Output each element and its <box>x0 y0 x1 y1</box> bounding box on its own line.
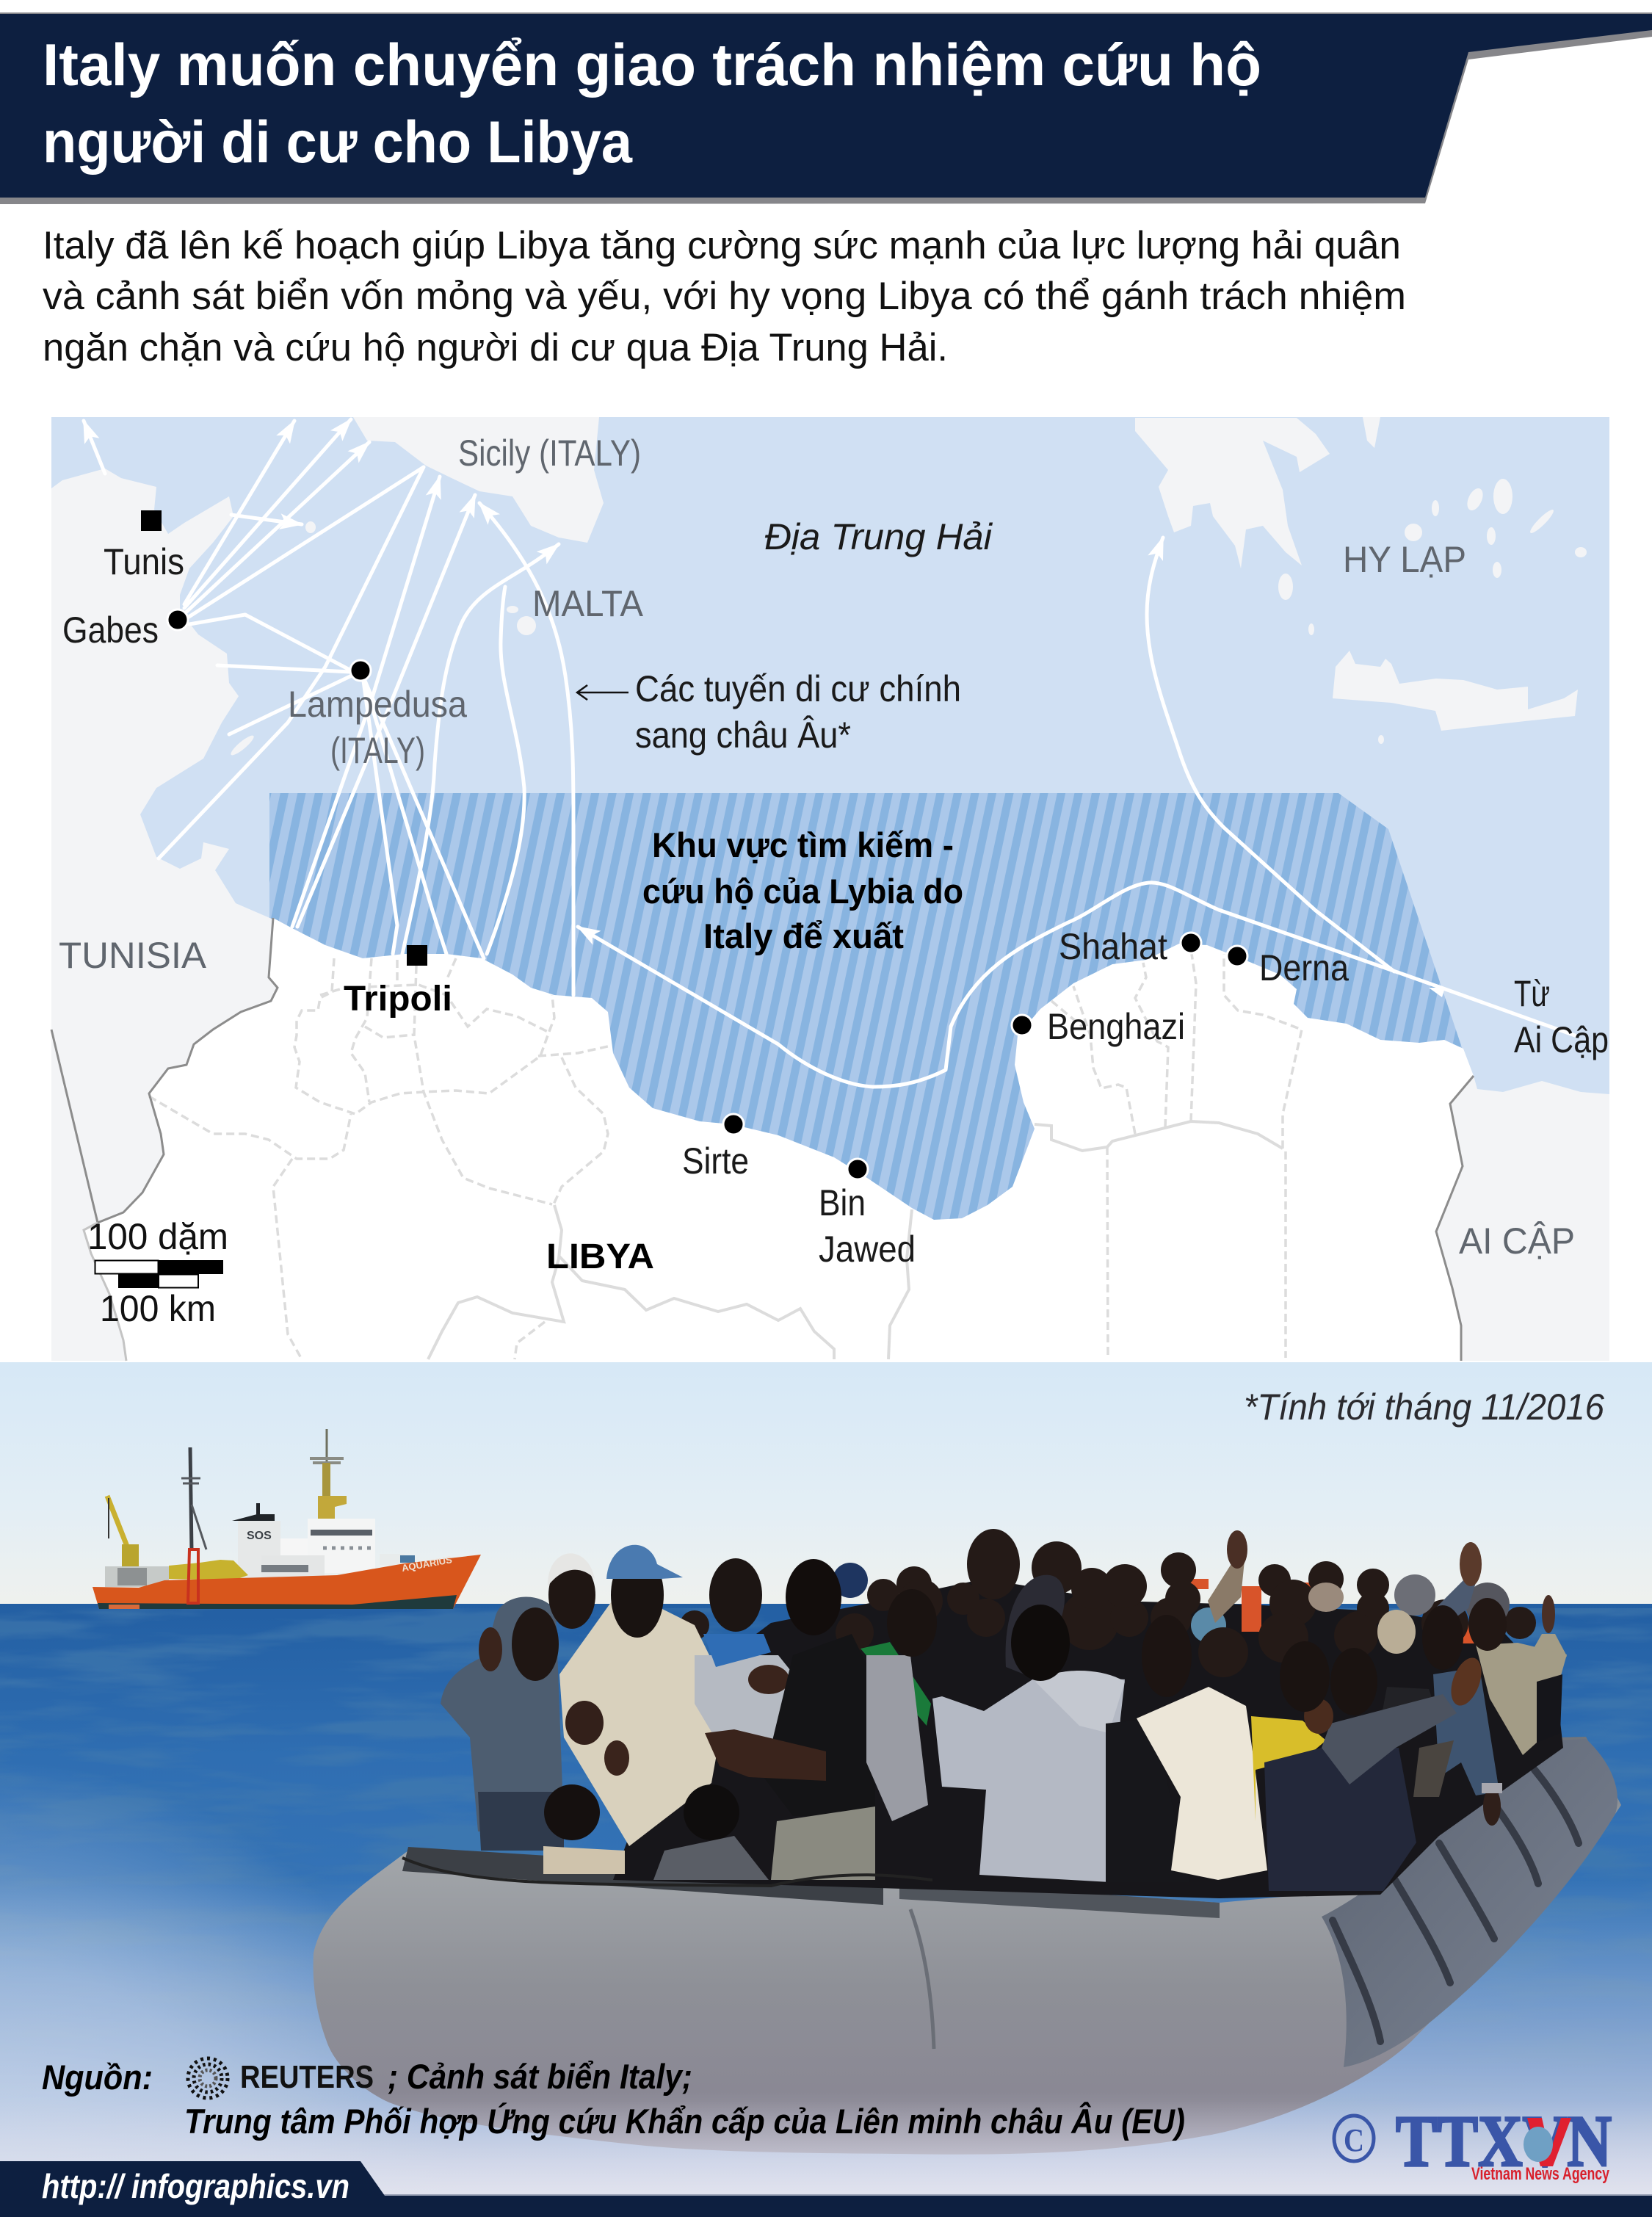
Reuters logo <box>188 2058 374 2098</box>
islands: Malta and Pantelleria <box>228 521 540 758</box>
ship <box>93 1429 481 1609</box>
man in white puffer jacket <box>1137 1615 1267 1880</box>
map labels: cities: Benghazi <box>1047 1006 1185 1047</box>
map labels: sea and countries <box>59 433 1575 1262</box>
man in navy with raised arm <box>1264 1641 1488 1891</box>
zone label <box>642 825 963 955</box>
background heads <box>680 1529 1536 1677</box>
capital markers <box>141 510 427 966</box>
icon: Reuters dot sphere <box>188 2058 228 2098</box>
map labels: cities: sang châu Âu* <box>635 715 851 756</box>
man with white hat <box>548 1553 595 1629</box>
dark jacket and striped sleeve <box>1380 1687 1454 1797</box>
land: Tunisia and Algeria <box>51 469 294 1361</box>
migration routes <box>84 419 1575 1087</box>
sea <box>0 1604 1652 2217</box>
raised arms and hands <box>1208 1530 1567 1696</box>
blue cap in crowd <box>1191 1607 1226 1643</box>
source block: ; Cảnh sát biển Italy; <box>388 2057 692 2096</box>
front tube seam <box>910 1909 934 2049</box>
yellow jacket <box>1251 1716 1326 1821</box>
man in black shirt <box>705 1559 875 1816</box>
map labels: sea and countries: (ITALY) <box>330 730 425 771</box>
map labels: cities: Ai Cập <box>1514 1019 1609 1060</box>
sky <box>0 1362 1652 1605</box>
intro paragraph: Italy đã lên kế hoạch giúp Libya tăng cường sức mạnh của lực lượng hải quân <box>43 224 1401 267</box>
map labels: cities: Bin <box>819 1182 866 1223</box>
map labels: cities: Derna <box>1259 947 1349 988</box>
green jacket <box>861 1642 931 1726</box>
TTXVN logo: TTXVN <box>1396 2100 1612 2182</box>
land: Libya <box>84 918 1474 1361</box>
source block <box>42 2057 1185 2141</box>
zone label: Italy để xuất <box>703 916 904 955</box>
map labels: cities: Địa Trung Hải <box>764 516 993 557</box>
title: người di cư cho Libya <box>43 109 633 176</box>
Tripoli and Libya labels: Tripoli <box>344 980 452 1019</box>
pointer arrow <box>577 685 628 700</box>
search and rescue zone <box>269 793 1471 1248</box>
footer tab <box>0 2161 385 2217</box>
scale bar <box>87 1216 228 1329</box>
map labels: sea and countries: Lampedusa <box>288 684 467 725</box>
ship: AQUARIUS <box>401 1554 453 1574</box>
map labels: sea and countries: MALTA <box>532 583 644 624</box>
title <box>43 32 1261 176</box>
map labels: sea and countries: AI CẬP <box>1459 1220 1575 1262</box>
inflatable boat <box>314 1737 1621 2155</box>
internal boundaries <box>149 954 1302 1359</box>
date note: *Tính tới tháng 11/2016 <box>1244 1386 1604 1428</box>
map labels: sea and countries: HY LẠP <box>1343 539 1466 580</box>
source block: Trung tâm Phối hợp Ứng cứu Khẩn cấp của Liên minh châu Âu (EU) <box>184 2102 1185 2141</box>
man in grey hoodie at left <box>441 1597 564 1851</box>
map labels: cities <box>62 516 1609 1270</box>
sea fade at left <box>0 1762 455 2217</box>
intro paragraph: ngăn chặn và cứu hộ người di cư qua Địa Trung Hải. <box>43 326 948 369</box>
dark crowd mass <box>613 1579 1563 1898</box>
map labels: sea and countries: TUNISIA <box>59 935 207 976</box>
dark rim of front tube <box>402 1847 883 1905</box>
map labels: cities: Sirte <box>682 1140 749 1182</box>
map labels: cities: Gabes <box>62 610 159 651</box>
source block: Nguồn: <box>42 2058 153 2097</box>
map labels: cities: Shahat <box>1059 926 1167 967</box>
grey jacket with blue hood <box>695 1558 805 1777</box>
man in light grey hoodie <box>932 1605 1125 1882</box>
intro paragraph <box>43 224 1406 369</box>
sea <box>51 417 1609 1361</box>
map labels: cities: Các tuyến di cư chính <box>635 668 961 709</box>
panel: photo <box>0 1362 1652 2217</box>
Tripoli and Libya labels: LIBYA <box>546 1237 654 1276</box>
sea fade <box>0 1880 1652 2217</box>
orange life vests <box>1186 1579 1479 1643</box>
city markers <box>167 610 1247 1179</box>
lower fade <box>0 2100 1652 2217</box>
scale bar: 100 dặm <box>87 1216 228 1257</box>
panel: map <box>51 417 1609 1361</box>
small arrowhead on Egypt route <box>1429 988 1445 997</box>
tube stripes <box>1333 1770 1579 2041</box>
Tripoli and Libya labels <box>344 980 654 1276</box>
district boundaries <box>428 1121 1283 1359</box>
scale bar: 100 km <box>100 1288 216 1329</box>
country borders <box>51 918 1474 1361</box>
map labels: cities: Từ <box>1514 973 1550 1014</box>
TTXVN logo <box>1334 2100 1612 2184</box>
second rim panel <box>899 1880 1220 1918</box>
header banner <box>0 12 1652 204</box>
land: Sicily <box>353 417 604 543</box>
dark clothed man <box>1106 1718 1190 1882</box>
seated figures at front <box>543 1784 769 1880</box>
right beige jacket man <box>1468 1598 1567 1755</box>
camouflage trousers <box>771 1806 875 1880</box>
footer bar <box>0 2161 1652 2217</box>
rope on boat <box>402 1858 932 1886</box>
zone label: Khu vực tìm kiếm - <box>652 825 954 864</box>
grey jacket man <box>866 1589 937 1821</box>
land: Greece <box>1135 417 1587 744</box>
right tube <box>1322 1739 1617 2067</box>
headscarf <box>1006 1575 1065 1674</box>
zone label: cứu hộ của Lybia do <box>642 872 963 911</box>
crowd <box>402 1529 1567 1898</box>
title: Italy muốn chuyển giao trách nhiệm cứu hộ <box>43 32 1261 98</box>
beanies <box>1308 1574 1510 1654</box>
blue shirt man at right <box>1422 1605 1502 1826</box>
ship: SOS <box>247 1530 272 1542</box>
map labels: cities: Jawed <box>819 1229 916 1270</box>
icon: copyright: C <box>1344 2122 1364 2158</box>
man with blue cap and white jacket <box>559 1545 728 1846</box>
icon: globe and red V <box>1524 2118 1571 2166</box>
intro paragraph: và cảnh sát biển vốn mỏng và yếu, với hy vọng Libya có thể gánh trách nhiệm <box>43 275 1406 318</box>
map labels: sea and countries: Sicily (ITALY) <box>458 433 641 474</box>
website url: http:// infographics.vn <box>42 2167 349 2205</box>
Reuters logo: REUTERS <box>240 2059 374 2095</box>
icon: copyright <box>1334 2116 1374 2161</box>
map labels: cities: Tunis <box>104 541 184 582</box>
sea texture <box>0 1608 1652 2217</box>
land: Egypt <box>1436 1076 1609 1361</box>
